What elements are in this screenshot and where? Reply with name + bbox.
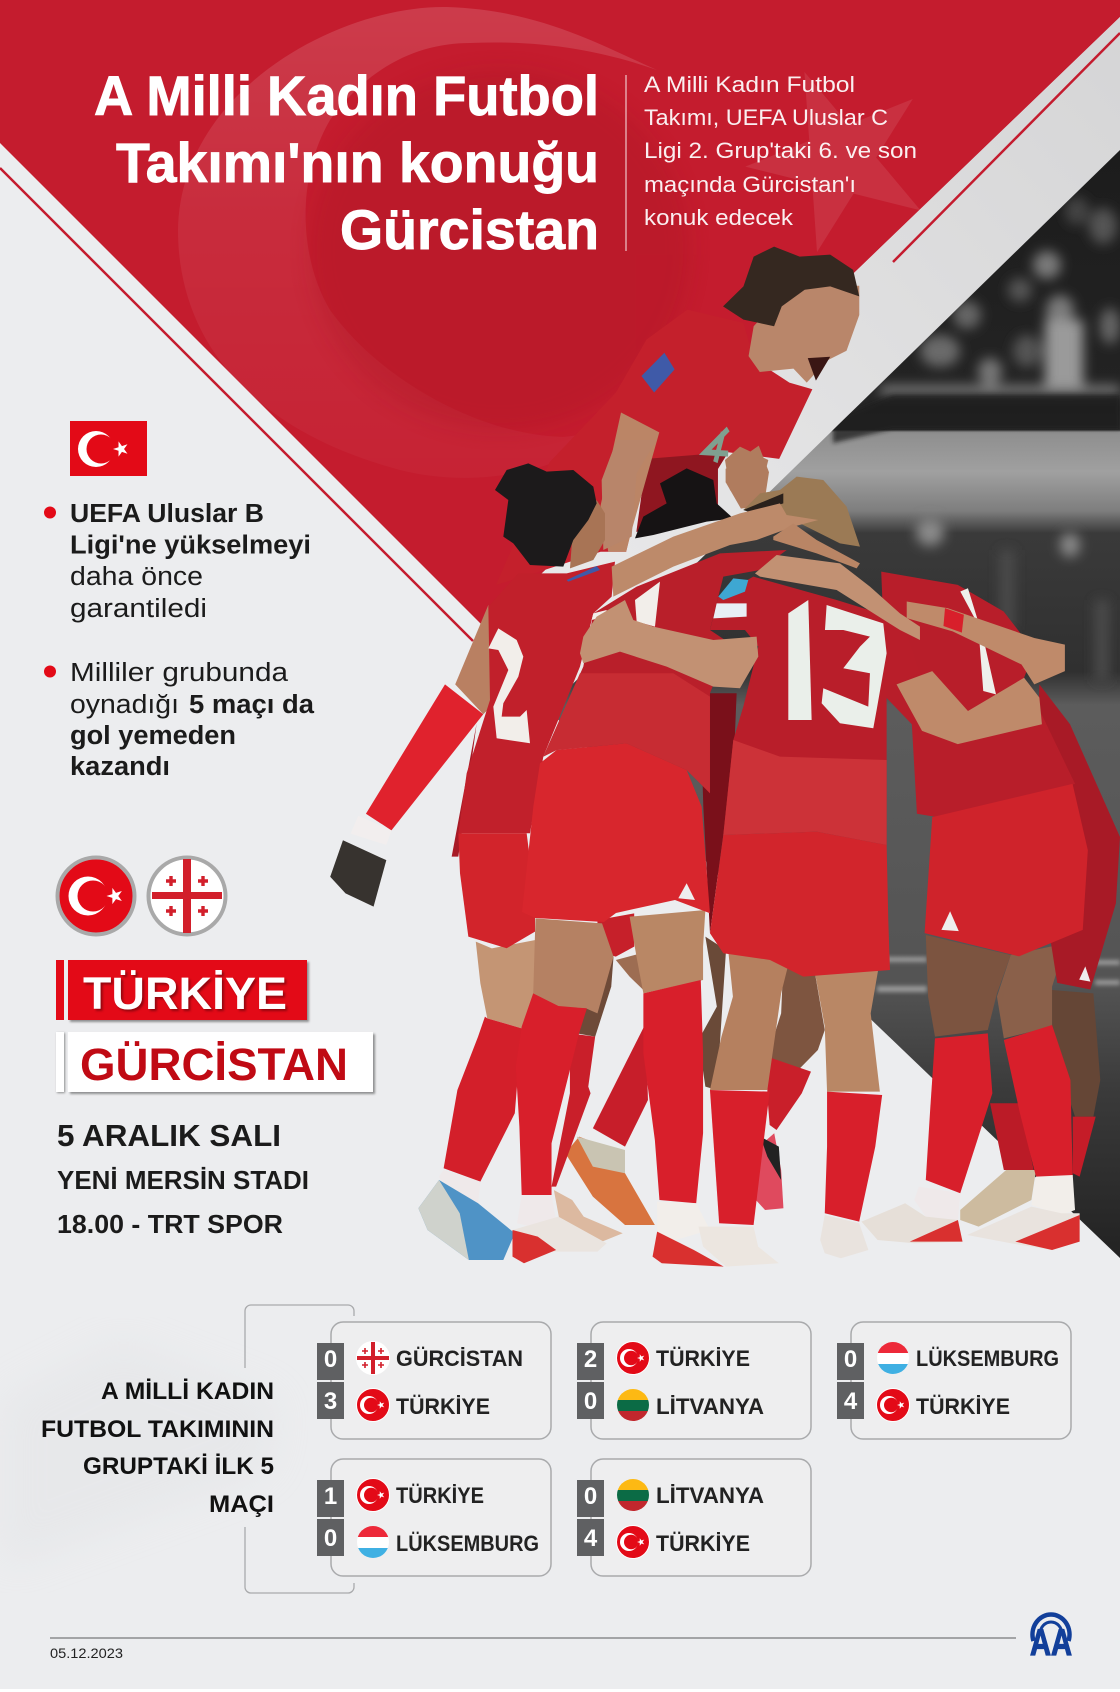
bullet point one: daha önce [70,563,203,591]
results heading [41,1378,274,1518]
rear inner sock and boot [960,1103,1036,1227]
right grey band [485,17,1120,709]
intro text [644,72,917,230]
bullet point two: gol yemeden [70,722,236,750]
match card: Litvanya 0-4 Türkiye: 0 [584,1483,597,1510]
match card: Litvanya 0-4 Türkiye: TÜRKİYE [656,1531,750,1556]
bullet point one [44,500,311,623]
icon: Turkey round flag [58,858,134,934]
stand railing [833,395,1120,443]
results heading: GRUPTAKİ İLK 5 [83,1453,274,1480]
match card: Türkiye 2-0 Litvanya [577,1322,811,1439]
team bar: Türkiye: TÜRKİYE [83,968,287,1019]
player B left leg [513,918,614,1263]
photo: huddle torsos [452,440,920,977]
lower stadium blobs [916,518,1109,680]
player 13 jersey [710,577,920,845]
player 13 shorts [710,832,890,977]
match details: 5 ARALIK SALI [57,1118,281,1153]
bullet point one: Ligi'ne yükselmeyi [70,532,311,560]
orange boot leg [554,1023,655,1242]
arms of player 13 [773,523,860,568]
title divider [625,75,627,251]
results heading: FUTBOL TAKIMININ [41,1416,274,1443]
dark center hair [635,468,733,538]
match details [57,1118,309,1239]
title [94,64,599,261]
match card: Gürcistan 0-3 Türkiye [317,1322,551,1439]
photo: raised arm of player 2 [330,605,493,907]
bullet point two: Milliler grubunda [70,659,289,687]
left player A leg [418,940,535,1260]
match details: 18.00 - TRT SPOR [57,1209,283,1239]
results bracket [245,1305,354,1593]
match card: Gürcistan 0-3 Türkiye: TÜRKİYE [396,1394,490,1419]
date: 05.12.2023 [50,1645,123,1661]
icon: AA logo: AA [1030,1622,1072,1663]
thin red line right [893,33,1120,262]
center back leg [698,937,825,1210]
title: Takımı'nın konuğu [116,131,599,194]
match card: Türkiye 1-0 Lüksemburg: 1 [324,1483,337,1510]
icon: Turkish flag [70,421,147,476]
match card: Litvanya 0-4 Türkiye: LİTVANYA [656,1483,764,1508]
bullet point two: kazandı [70,753,170,781]
faint star [746,72,920,252]
blond hair [743,477,860,547]
photo: far right player and right player torso [881,572,1120,990]
rear far right leg [1052,990,1100,1177]
thin red line left [0,168,473,641]
match card: Türkiye 1-0 Lüksemburg: 0 [324,1525,337,1552]
match card: Türkiye 2-0 Litvanya: 0 [584,1388,597,1415]
match card: Litvanya 0-4 Türkiye: 4 [584,1525,598,1552]
pitch lines [877,957,1120,992]
icon: Georgia round flag [148,858,226,934]
bottom white strip [0,1689,1120,1692]
player A number [488,628,530,743]
match card: Türkiye 1-0 Lüksemburg: LÜKSEMBURG [396,1531,539,1556]
match card: Gürcistan 0-3 Türkiye: GÜRCİSTAN [396,1346,523,1371]
bullet point two: oynadığı [70,691,179,719]
match card: Lüksemburg 0-4 Türkiye: 4 [844,1388,858,1415]
bullet point two: 5 maçı da [189,691,315,719]
hand on back arm [580,600,758,688]
match card: Litvanya 0-4 Türkiye [577,1459,811,1576]
top player arm over hair [602,440,657,550]
footer rule [50,1637,1016,1639]
match card: Lüksemburg 0-4 Türkiye [837,1322,1071,1439]
match card: Lüksemburg 0-4 Türkiye: 0 [844,1346,857,1373]
match card: Lüksemburg 0-4 Türkiye: LÜKSEMBURG [916,1346,1059,1371]
intro text: Takımı, UEFA Uluslar C [644,105,888,130]
rear inner leg [552,913,643,1187]
player B right leg [630,910,779,1267]
photo: top leaping player [496,247,859,585]
team bar: Gürcistan: GÜRCİSTAN [80,1039,348,1090]
team bar: Türkiye [56,960,307,1020]
photo: celebrating players legs [418,910,1100,1267]
intro text: maçında Gürcistan'ı [644,172,856,197]
match details: YENİ MERSİN STADI [57,1165,309,1195]
match card: Türkiye 1-0 Lüksemburg [317,1459,551,1576]
player A head [570,500,605,568]
panel: red header triangle with faint flag [0,0,1120,628]
far-left sleeve under jersey [452,723,477,857]
player B jersey [543,550,787,793]
player A shorts [458,833,535,948]
intro text: A Milli Kadın Futbol [644,72,855,97]
arm across back [612,503,818,597]
match card: Türkiye 1-0 Lüksemburg: TÜRKİYE [396,1483,484,1508]
bullet point two [44,659,315,781]
bullet point one: UEFA Uluslar B [70,500,264,528]
match card: Gürcistan 0-3 Türkiye: 0 [324,1346,337,1373]
intro text: Ligi 2. Grup'taki 6. ve son [644,138,917,163]
title: Gürcistan [340,198,599,261]
right player legs [861,935,1080,1250]
results heading: MAÇI [209,1491,274,1518]
dark gap between shirts [700,693,737,933]
photo: right player arms [897,601,1065,744]
faint crescent [178,7,656,430]
player 13 legs [710,952,882,1258]
intro text: konuk edecek [644,205,794,230]
background texture: lower left smudges [0,1340,280,1570]
blurred crowd [880,197,1120,394]
panel: stadium photo background [540,150,1120,1260]
match card: Lüksemburg 0-4 Türkiye: TÜRKİYE [916,1394,1010,1419]
title: A Milli Kadın Futbol [94,64,599,127]
inner dark disc [328,88,676,414]
icon: AA logo [1030,1615,1072,1663]
bullet point one: garantiledi [70,595,207,623]
match card: Türkiye 2-0 Litvanya: 2 [584,1346,597,1373]
match card: Gürcistan 0-3 Türkiye: 3 [324,1388,337,1415]
results heading: A MİLLİ KADIN [101,1378,274,1405]
match card: Türkiye 2-0 Litvanya: LİTVANYA [656,1394,764,1419]
player A jersey [458,562,615,833]
player B shorts [522,743,710,922]
match card: Türkiye 2-0 Litvanya: TÜRKİYE [656,1346,750,1371]
